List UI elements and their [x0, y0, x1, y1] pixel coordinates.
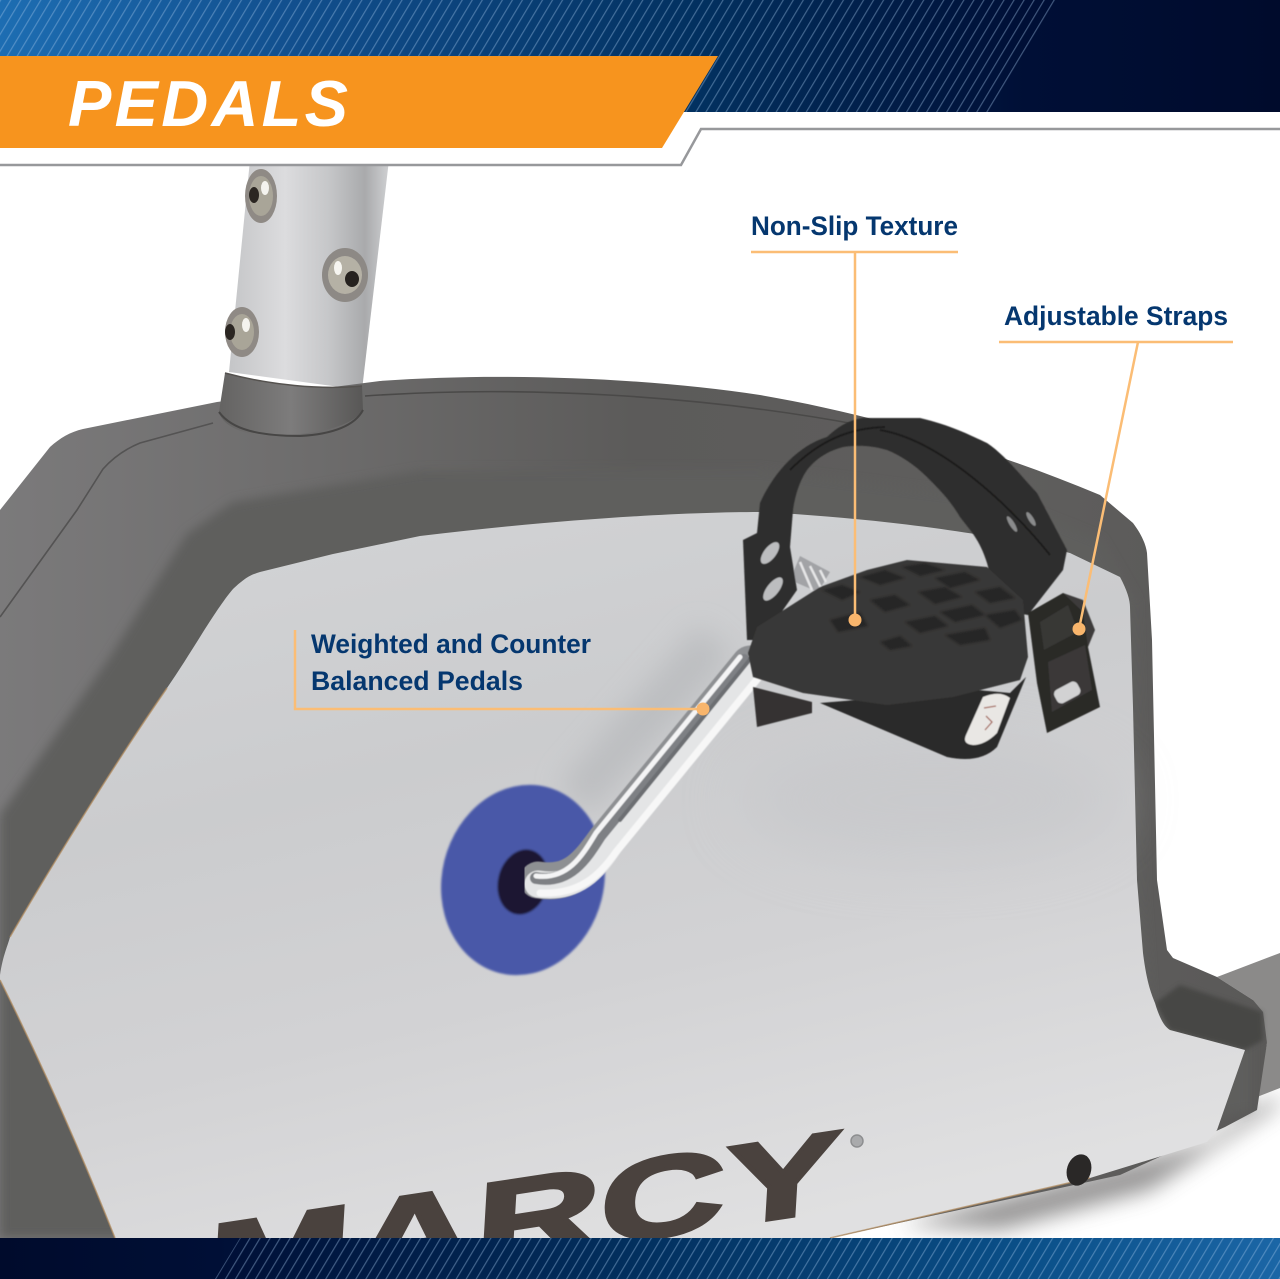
leader dot	[1072, 622, 1086, 636]
housing lower right dark shadow	[1155, 985, 1263, 1050]
panel shadow from crank	[575, 640, 715, 800]
MARCY logo	[218, 1128, 864, 1238]
housing seam lines	[0, 423, 213, 617]
callout label line two: Balanced Pedals	[311, 666, 523, 696]
housing darker bevel	[0, 470, 1250, 1238]
silver side panel	[0, 512, 1245, 1238]
chrome crank arm	[536, 652, 758, 893]
seat post collar	[219, 373, 363, 436]
bike housing shell	[0, 377, 1267, 1238]
title: PEDALS	[68, 67, 348, 140]
header band	[0, 0, 1280, 166]
chrome pedal spindle	[794, 556, 830, 590]
panel edge glints	[0, 688, 1090, 1238]
orange title banner	[0, 56, 718, 148]
floor shadow below housing	[900, 1098, 1280, 1230]
callout label: Non-Slip Texture	[751, 211, 958, 241]
non-slip texture blocks	[822, 563, 1022, 650]
callout label: Adjustable Straps	[1004, 301, 1228, 331]
pedal	[743, 418, 1100, 759]
grey header rule	[0, 129, 1280, 165]
callout: non-slip texture	[751, 211, 958, 626]
left strap tab	[753, 687, 812, 727]
small hole in panel	[1066, 1154, 1092, 1186]
callout: weighted pedals	[295, 629, 710, 716]
pedal platform	[748, 560, 1028, 705]
callout label: Weighted and Counter	[311, 629, 591, 659]
leader dot	[848, 614, 862, 626]
strap loop	[743, 418, 1067, 640]
leader line	[295, 630, 703, 709]
right strap buckle	[1028, 593, 1100, 733]
blue axle disc	[440, 783, 606, 977]
leader line	[751, 252, 958, 620]
grey seat post	[225, 160, 389, 390]
callout: adjustable straps	[999, 301, 1233, 636]
pedal wedge and reflector	[820, 677, 1026, 759]
rear foot of bike	[1217, 953, 1280, 1097]
footer band	[0, 1238, 1280, 1279]
leader line	[999, 342, 1233, 629]
leader dot	[696, 702, 710, 716]
